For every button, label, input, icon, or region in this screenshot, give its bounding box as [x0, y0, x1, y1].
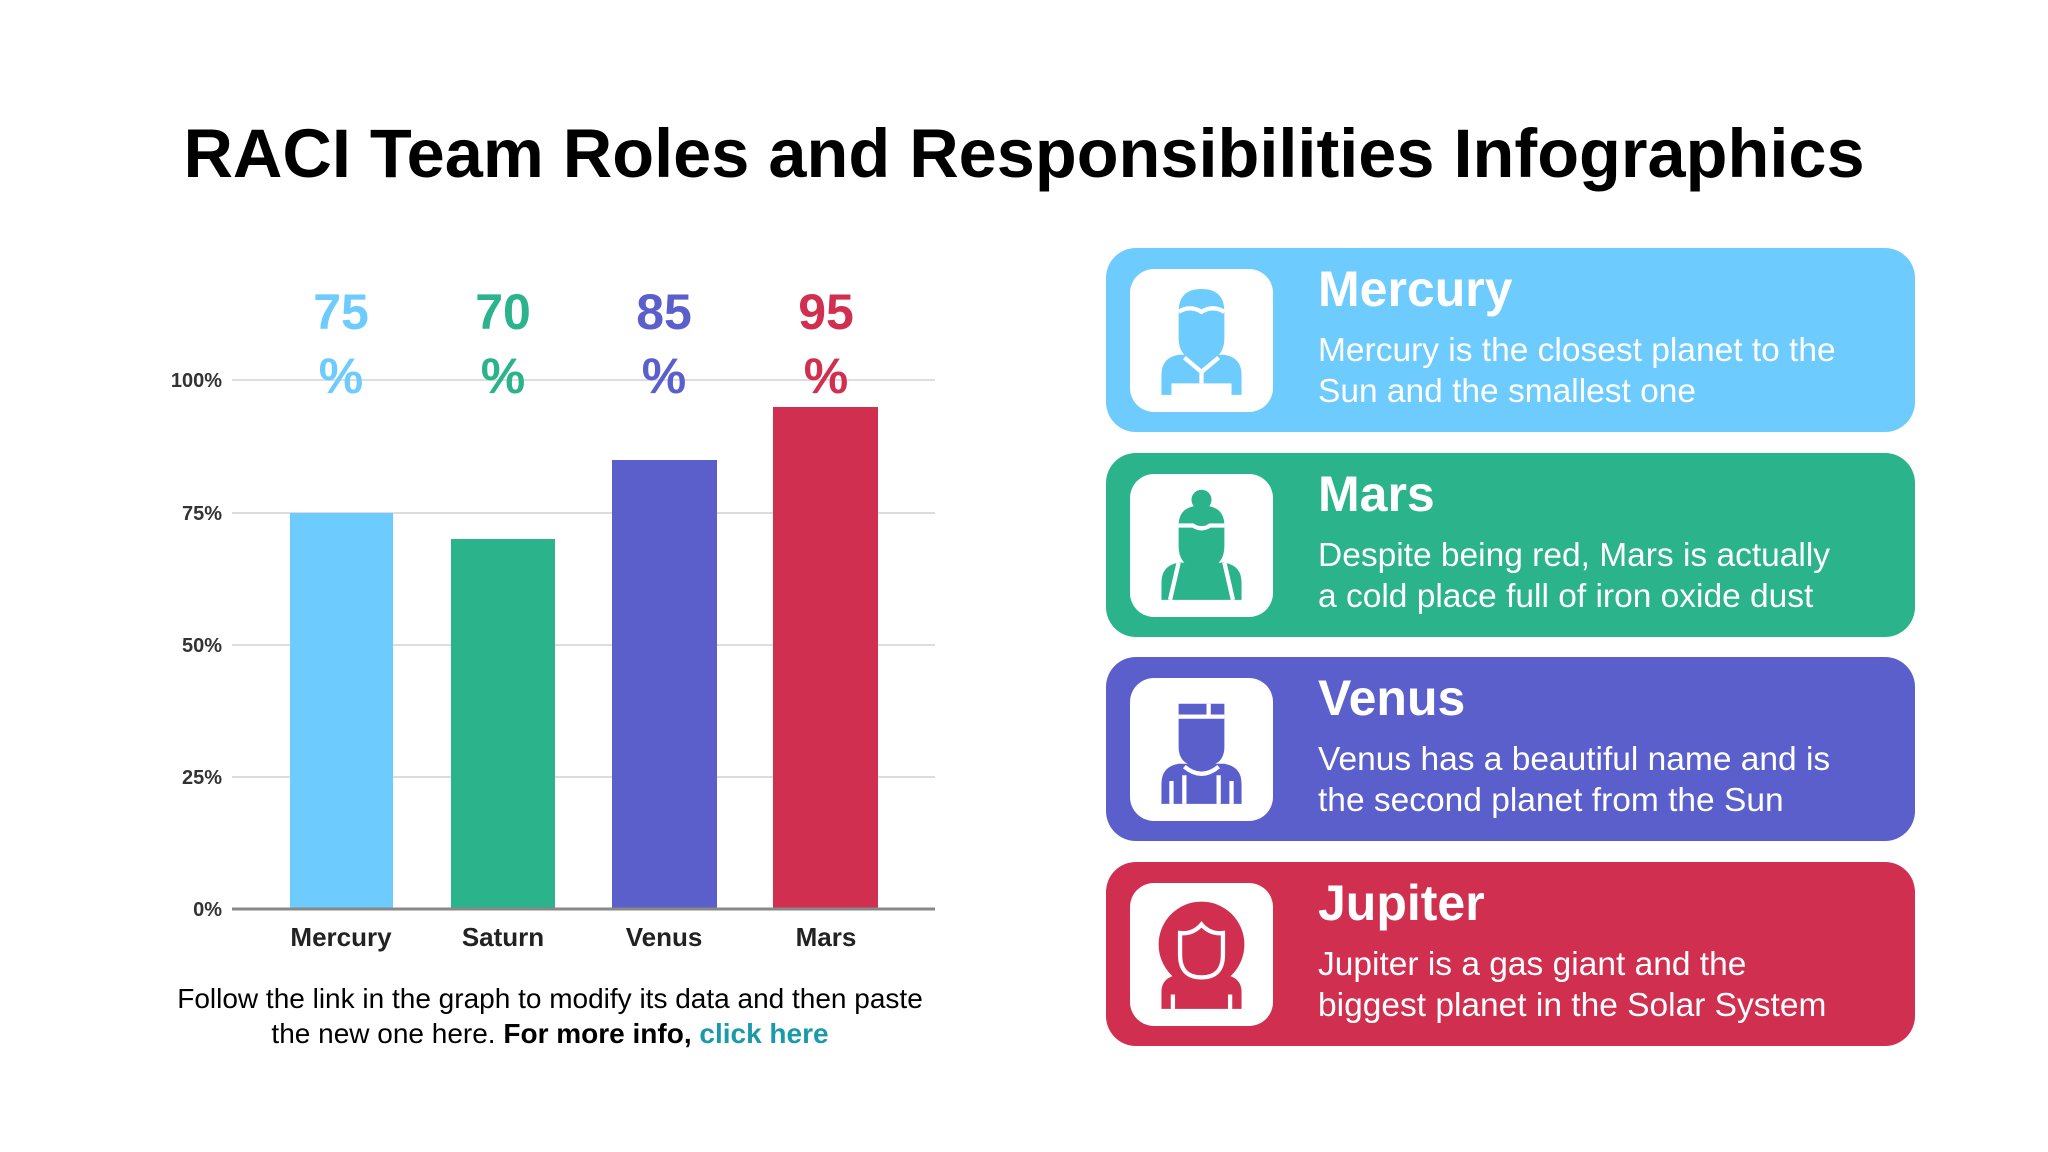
- bar chart: %: [804, 348, 848, 404]
- bar chart: Saturn: [462, 922, 544, 952]
- icon: mercury person: [1130, 269, 1273, 412]
- bar chart: 70: [475, 284, 531, 340]
- title: RACI Team Roles and Responsibilities Infographics: [183, 115, 1865, 192]
- bar chart: 75: [313, 284, 369, 340]
- bar chart: [171, 284, 935, 952]
- bar chart: %: [319, 348, 363, 404]
- card: Mercury: Sun and the smallest one: [1318, 373, 1696, 410]
- bar chart: Mercury: [290, 922, 392, 952]
- caption: Follow the link in the graph to modify its data and then paste: [177, 983, 923, 1014]
- icon: mars person: [1130, 474, 1273, 617]
- bar chart: Venus: [626, 922, 702, 952]
- card: Venus: the second planet from the Sun: [1318, 782, 1784, 819]
- icon: jupiter person: [1130, 883, 1273, 1026]
- bar chart: Mars: [796, 922, 856, 952]
- card: Jupiter: Jupiter is a gas giant and the: [1318, 946, 1746, 983]
- bar chart: 100%: [171, 370, 222, 392]
- card: Mars: a cold place full of iron oxide dust: [1318, 578, 1813, 615]
- caption: the new one here. For more info, click here: [271, 1018, 829, 1049]
- bar chart: 75%: [182, 503, 222, 525]
- card: Venus: [1106, 657, 1915, 841]
- icon: venus person: [1130, 678, 1273, 821]
- card: Venus: Venus has a beautiful name and is: [1318, 741, 1830, 778]
- card: Mars: Mars: [1318, 466, 1435, 522]
- card: Jupiter: [1106, 862, 1915, 1046]
- card: Jupiter: biggest planet in the Solar System: [1318, 987, 1826, 1024]
- bar chart: 95: [798, 284, 854, 340]
- card: Mars: [1106, 453, 1915, 637]
- bar chart: %: [481, 348, 525, 404]
- bar chart: 25%: [182, 767, 222, 789]
- card: Mercury: [1106, 248, 1915, 432]
- card: Mercury: Mercury is the closest planet to the: [1318, 332, 1836, 369]
- bar chart: 0%: [193, 899, 222, 921]
- bar chart: %: [642, 348, 686, 404]
- card: Mercury: Mercury: [1318, 261, 1513, 317]
- card: Mars: Despite being red, Mars is actually: [1318, 537, 1830, 574]
- card: Jupiter: Jupiter: [1318, 875, 1485, 931]
- caption: [177, 983, 923, 1049]
- card: Venus: Venus: [1318, 670, 1465, 726]
- bar chart: 50%: [182, 635, 222, 657]
- bar chart: 85: [636, 284, 692, 340]
